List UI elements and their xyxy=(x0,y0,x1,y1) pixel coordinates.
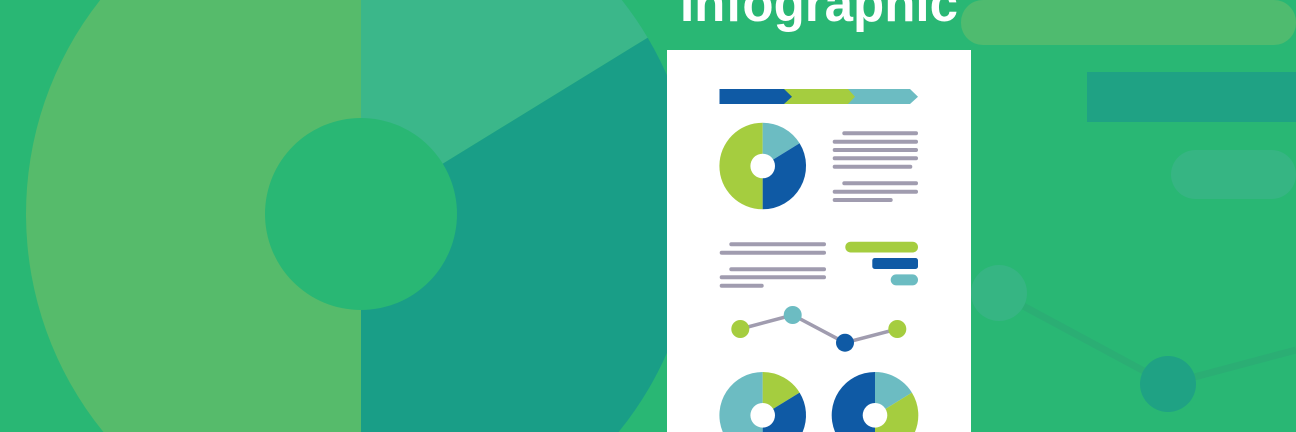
background rounded bar: light green xyxy=(961,0,1296,45)
background rounded bar: pale teal xyxy=(1171,150,1296,199)
background bar: teal xyxy=(1087,72,1296,122)
text lines block 2 xyxy=(720,242,826,288)
donut chart 2 xyxy=(719,372,806,432)
donut chart 3 xyxy=(832,372,918,432)
donut chart 1 xyxy=(719,123,806,209)
background line chart xyxy=(971,265,1296,412)
background pie chart xyxy=(26,0,696,432)
arrow progress bar xyxy=(720,89,918,104)
horizontal bar chart xyxy=(845,242,918,285)
text lines block 1 xyxy=(833,131,918,202)
line chart xyxy=(731,306,906,352)
document page xyxy=(667,50,971,432)
